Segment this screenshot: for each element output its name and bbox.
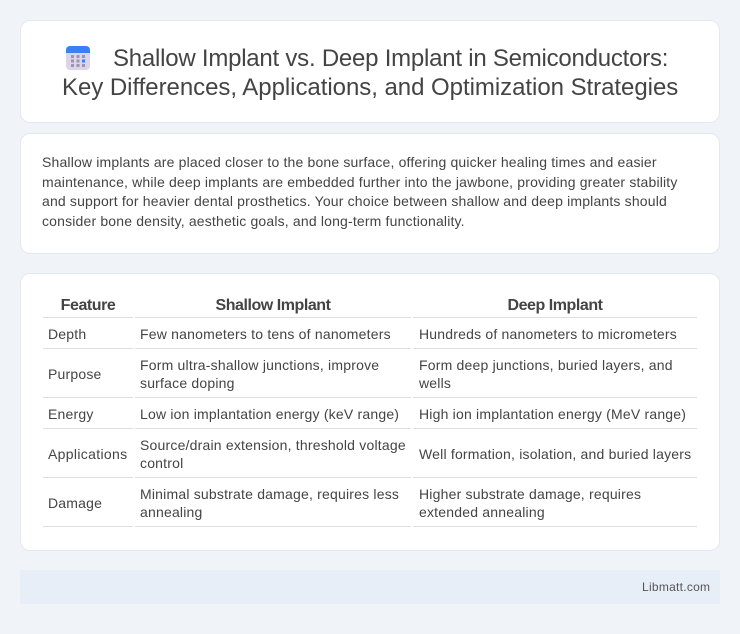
comparison table: Low ion implantation energy (keV range) [140,406,399,422]
comparison table: Minimal substrate damage, requires less [140,486,399,502]
title: Shallow Implant vs. Deep Implant in Semiconductors: [113,45,668,72]
comparison table: Source/drain extension, threshold voltage [140,437,406,453]
icon: calendar [66,46,90,70]
comparison table: surface doping [140,375,235,391]
comparison table: extended annealing [419,504,545,520]
comparison table: Higher substrate damage, requires [419,486,641,502]
comparison table: Few nanometers to tens of nanometers [140,326,391,342]
footer text: Libmatt.com [642,580,710,594]
intro text: maintenance, while deep implants are embedded further into the jawbone, providing greater stability [42,174,678,190]
comparison table: wells [419,375,451,391]
comparison table: Energy [48,406,94,422]
comparison table: Purpose [48,366,102,382]
comparison table: Damage [48,495,102,511]
comparison table: annealing [140,504,203,520]
footer bar [20,570,720,604]
table panel [20,273,720,551]
header panel [20,20,720,123]
intro text: Shallow implants are placed closer to the bone surface, offering quicker healing times and easier [42,154,657,170]
title: Key Differences, Applications, and Optimization Strategies [62,74,678,101]
comparison table: Well formation, isolation, and buried layers [419,446,691,462]
comparison table: control [140,455,183,471]
comparison table: Deep Implant [507,297,603,314]
intro text: and support for heavier dental prosthetics. Your choice between shallow and deep implants should [42,193,667,209]
comparison table: Hundreds of nanometers to micrometers [419,326,677,342]
comparison table: Feature [61,297,115,314]
intro text: consider bone density, aesthetic goals, and long-term functionality. [42,213,465,229]
intro text [42,154,678,229]
comparison table [43,297,697,527]
comparison table: Depth [48,326,86,342]
comparison table: Form deep junctions, buried layers, and [419,357,673,373]
comparison table: Shallow Implant [215,297,331,314]
intro panel [20,133,720,254]
comparison table: Applications [48,446,127,462]
title [62,45,678,101]
comparison table: High ion implantation energy (MeV range) [419,406,686,422]
comparison table: Form ultra-shallow junctions, improve [140,357,379,373]
